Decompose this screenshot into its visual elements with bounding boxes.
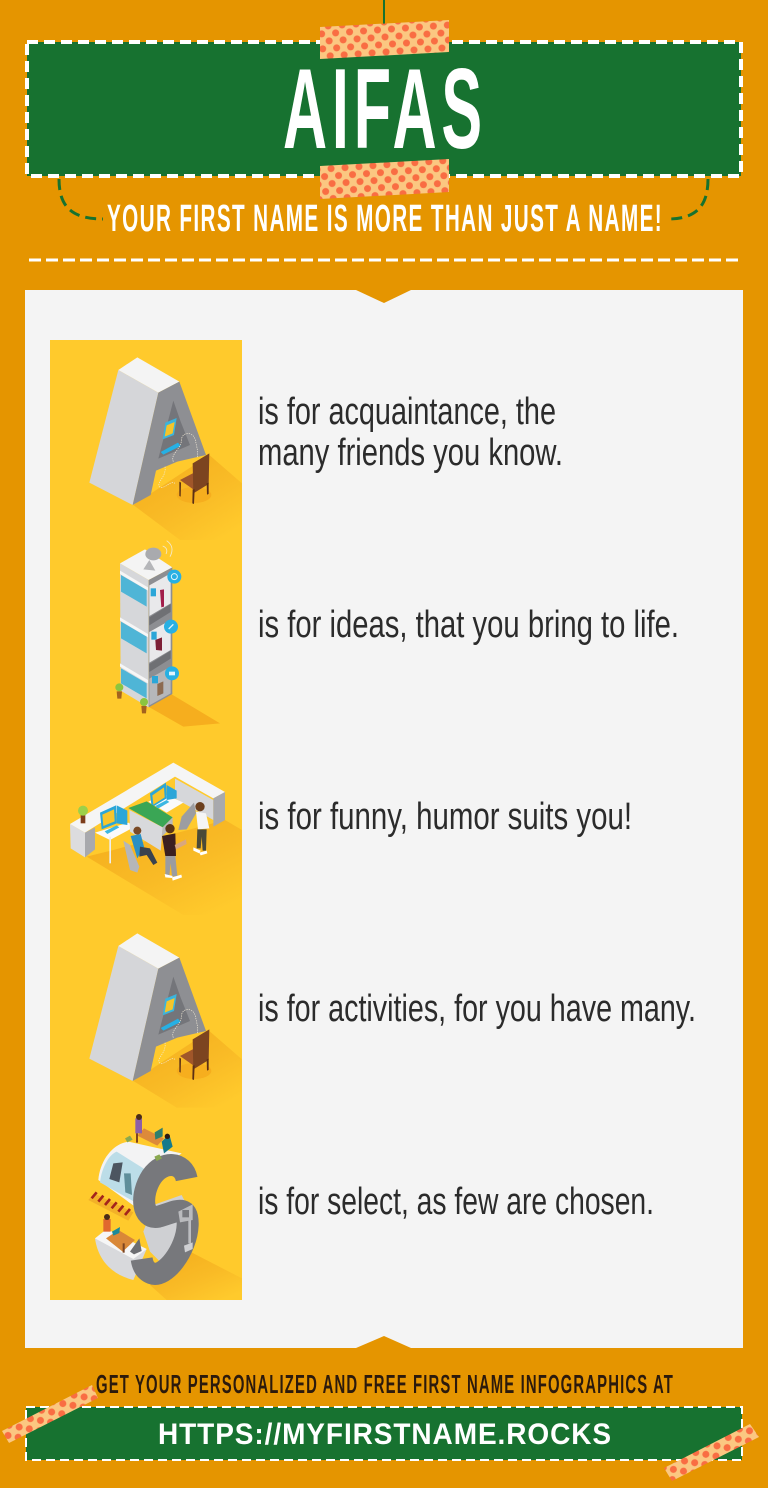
- tape: footer right: [664, 1424, 759, 1481]
- icon: letter A with desk: [89, 357, 242, 540]
- icon: letter S with desks: [88, 1114, 242, 1300]
- yellow illustration column: [50, 340, 242, 1300]
- tape: bottom: [320, 159, 449, 199]
- icon: office cubicle with people: [70, 763, 242, 915]
- footer url: HTTPS://MYFIRSTNAME.ROCKS: [158, 1418, 612, 1451]
- text: F funny: is for funny, humor suits you!: [258, 796, 632, 838]
- text: A acquaintance: is for acquaintance, the: [258, 391, 556, 433]
- tape: top: [320, 20, 449, 59]
- title: AIFAS: [283, 46, 487, 173]
- header banner: [27, 0, 741, 176]
- icon: tower building: [115, 541, 220, 727]
- tape: footer left: [2, 1385, 98, 1443]
- icon: letter A with desk (second): [89, 933, 242, 1108]
- subtitle with dashed brackets: [59, 179, 708, 240]
- footer banner: [26, 1407, 742, 1460]
- panel: main content: [25, 290, 743, 1348]
- text: many friends: many friends you know.: [258, 432, 563, 474]
